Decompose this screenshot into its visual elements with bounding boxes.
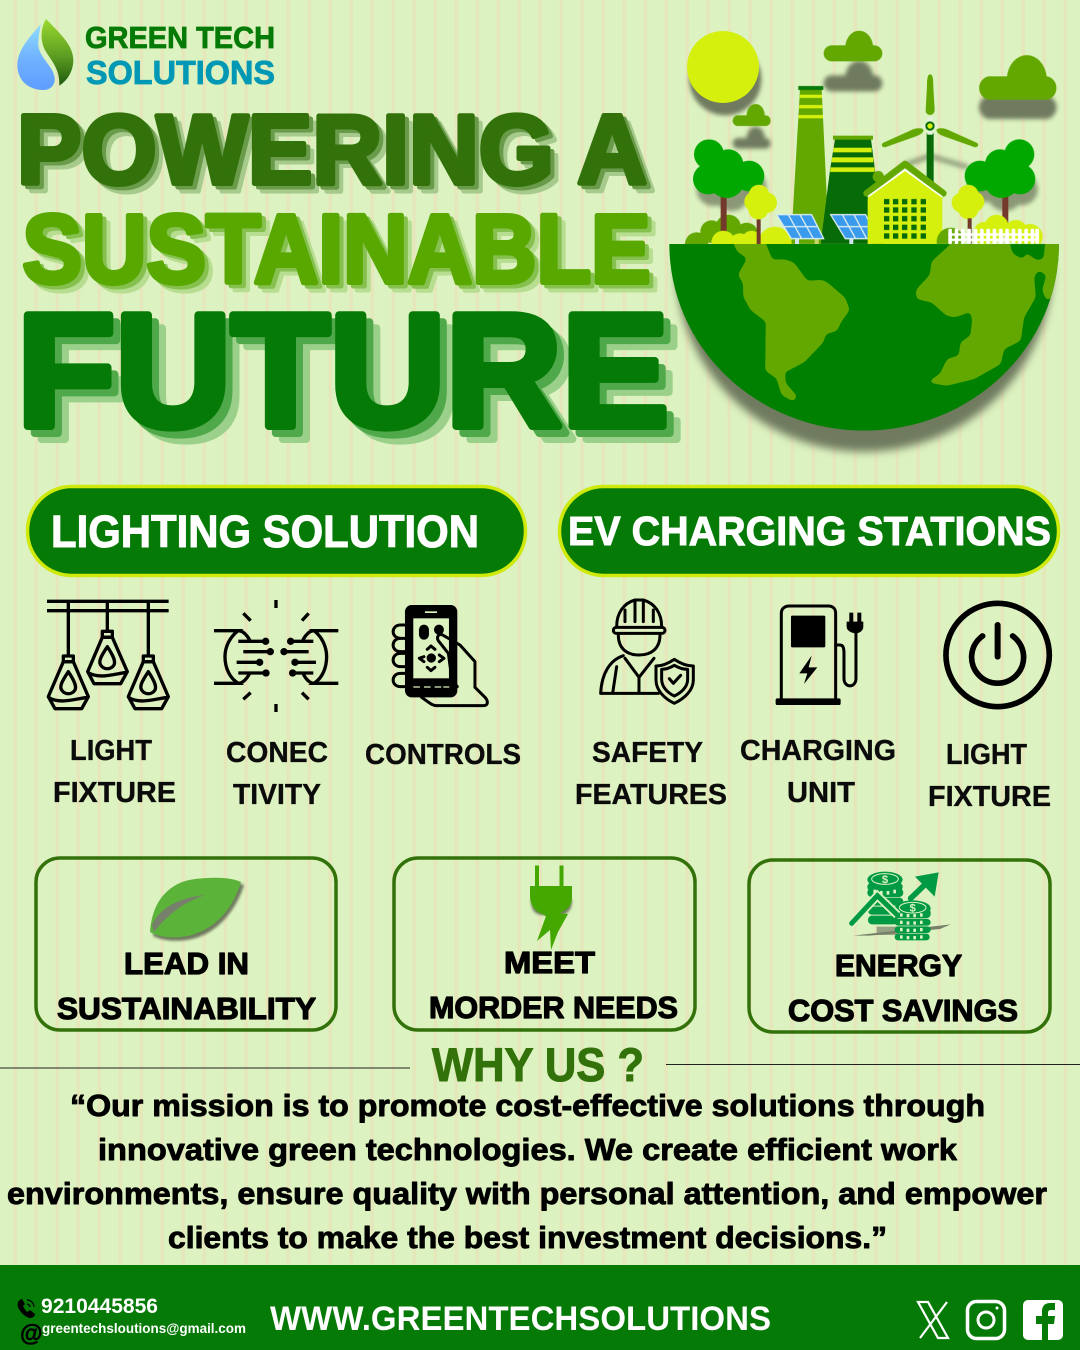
icon: solar panels [777,215,877,245]
label: light fixture right [928,739,1051,813]
icon: leaf [150,878,244,941]
label: charging unit: UNIT [787,777,855,809]
label: connectivity: TIVITY [233,779,321,811]
icon: coins and growth arrow [852,872,951,940]
label: light fixture right: FIXTURE [928,781,1051,813]
title line: sustainable: SUSTAINABLE [26,198,654,307]
panel: lighting solution header pill: LIGHTING SOLUTION [51,506,479,557]
label: safety features: SAFETY [592,737,703,769]
box text: MEET [504,945,595,980]
panel: ev charging stations header pill: EV CHARGING STATIONS [568,508,1051,554]
text block: mission quote: clients to make the best investment decisions.” [168,1220,887,1255]
icon: left trees and bushes [685,140,792,244]
contact: email [20,1320,246,1346]
box text [429,945,678,1025]
text block: mission quote [7,1088,1047,1255]
title line: future: FUTURE [24,288,676,468]
icon: chimney tower [791,86,829,244]
box text: LEAD IN [124,946,249,981]
continent: africa and europe [916,244,1059,386]
contact: email: @ [20,1320,42,1346]
label: light fixture [53,735,176,809]
icon: safety worker [601,600,693,703]
label: light fixture right: LIGHT [946,739,1027,771]
icon: water drop and leaf [17,19,73,90]
title line: sustainable: SUSTAINABLE [22,194,650,304]
globe shadow [676,267,1052,452]
title line: powering a: POWERING A [21,98,651,208]
globe [669,233,1070,431]
icon: power button [946,603,1049,707]
heading: why us [0,1038,1080,1091]
logo: green tech solutions [17,19,275,91]
label: charging unit [740,735,896,809]
panel: energy cost savings [749,860,1050,1032]
icon: clouds [733,31,1056,167]
title line: sustainable: SUSTAINABLE [30,202,658,311]
label: controls: CONTROLS [365,739,521,771]
icon: ev charging unit [776,606,863,705]
label: light fixture: LIGHT [70,735,152,767]
box text: COST SAVINGS [788,993,1018,1028]
icon: wind turbine [882,74,978,183]
title line: future: FUTURE [17,281,669,461]
icon: cooling tower [821,136,884,244]
icon: plug with lightning bolt [530,866,572,950]
label: safety features: FEATURES [575,779,727,811]
contact: phone: 9210445856 [41,1295,158,1318]
icon: connectivity [214,600,338,712]
icon: phone controls [393,605,487,706]
icon: right trees and fence [937,139,1043,256]
icon: x [918,1302,948,1338]
logo text: GREEN TECH [85,20,275,55]
box text: SUSTAINABILITY [57,991,316,1026]
icon: pendant lights [47,601,169,709]
panel: lighting solution header pill [28,486,526,576]
icon: house [867,164,943,244]
logo: green tech solutions: SOLUTIONS [86,54,275,91]
box text [788,948,1018,1028]
label: charging unit: CHARGING [740,735,896,767]
icon: sun [687,31,761,115]
icon: coins and growth arrow: $ [910,903,917,915]
illustration: green city on half globe [669,31,1070,452]
label: safety features [575,737,727,811]
text block: mission quote: environments, ensure quality with personal attention, and empower [7,1176,1047,1211]
contact: email: greentechsloutions@gmail.com [42,1320,246,1336]
text block: mission quote: innovative green technologies. We create efficient work [98,1132,958,1167]
title line: powering a: POWERING A [25,102,655,212]
title line: powering a: POWERING A [17,94,647,204]
label: light fixture: FIXTURE [53,777,176,809]
label: connectivity: CONEC [226,737,328,769]
icon: facebook [1023,1300,1063,1340]
box text: MORDER NEEDS [429,990,678,1025]
panel: lead in sustainability [36,858,336,1030]
panel: meet morder needs [394,858,695,1030]
icon: instagram [968,1302,1004,1338]
title [17,94,683,474]
box text [57,946,316,1026]
title line: future: FUTURE [31,294,683,474]
text block: mission quote: “Our mission is to promote cost-effective solutions through [70,1088,985,1123]
continent: americas [732,233,850,401]
label: connectivity [226,737,328,811]
box text: ENERGY [835,948,962,983]
heading: why us: WHY US ? [432,1038,644,1091]
icon: coins and growth arrow: $ [882,874,889,886]
footer bar [0,1265,1080,1350]
website url: WWW.GREENTECHSOLUTIONS [270,1300,771,1338]
panel: ev charging stations header pill [560,486,1058,576]
